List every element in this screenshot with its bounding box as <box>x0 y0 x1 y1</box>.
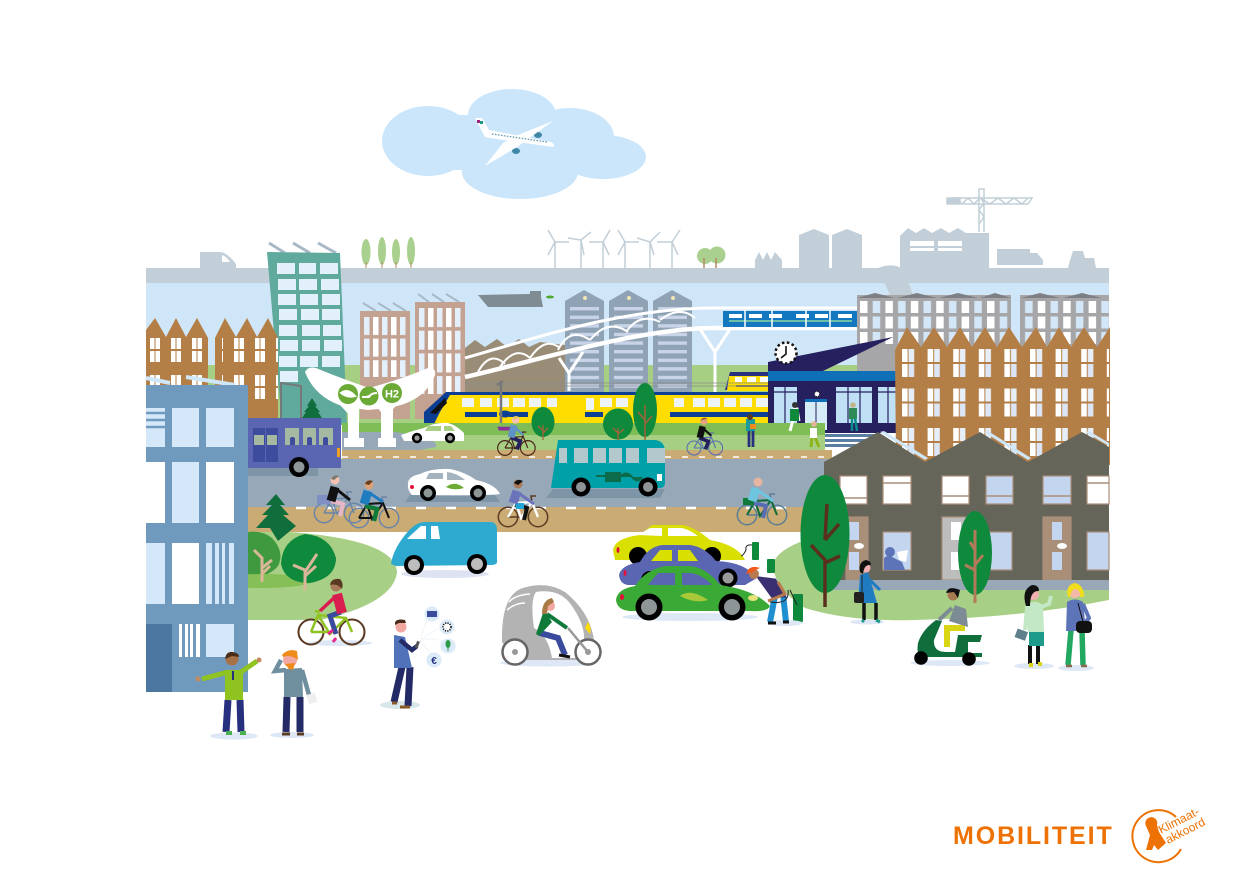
small pine by tower <box>302 398 322 418</box>
station pedestrians <box>746 402 857 447</box>
catenary frame <box>281 383 301 418</box>
yellow passenger train <box>424 392 768 424</box>
distant van <box>200 252 236 268</box>
cloud with airplane <box>382 89 646 199</box>
pink apartment buildings <box>360 294 465 419</box>
left park lawn <box>248 532 397 620</box>
dark row houses <box>824 431 1109 590</box>
purple bus <box>248 418 341 477</box>
woman in mint top <box>1014 585 1054 669</box>
station building <box>760 337 896 447</box>
medium tree <box>958 511 992 603</box>
tower windows <box>277 263 342 382</box>
silo buildings <box>565 290 692 393</box>
grey apartments <box>857 293 1109 373</box>
small white car <box>401 423 464 443</box>
small trees on verge <box>532 383 657 440</box>
white electric car <box>405 469 500 502</box>
large tree <box>800 475 850 607</box>
yellow parked car <box>613 525 745 565</box>
park cyclist <box>298 579 372 646</box>
wind turbines <box>548 230 680 268</box>
green electric car <box>616 566 770 621</box>
road cyclist black bike <box>349 480 399 528</box>
woman with blonde hair and bag <box>1058 583 1094 671</box>
hydrogen filling station <box>305 368 435 447</box>
velomobile tuk-tuk <box>500 585 600 666</box>
purple parked car <box>619 545 757 589</box>
poplar trees <box>362 237 415 268</box>
big brown apartment block <box>895 327 1110 465</box>
teal electric bus <box>546 440 665 498</box>
moored barge <box>478 291 554 307</box>
left brown row houses <box>146 318 278 420</box>
mechanic charging car <box>746 567 803 626</box>
two women chatting <box>1014 583 1094 671</box>
Klimaatakkoord logo: akkoord <box>1163 815 1207 847</box>
section title: MOBILITEIT <box>953 822 1114 850</box>
road surface and cycle paths <box>248 450 832 532</box>
blue elevated train <box>723 309 858 328</box>
distant tractor <box>1068 251 1096 268</box>
road cyclist with panniers <box>314 475 364 523</box>
teal office tower <box>267 243 347 425</box>
Klimaatakkoord logo: Klimaat- <box>1156 804 1202 837</box>
green scooter with rider <box>910 588 990 666</box>
green verge with grass <box>342 423 825 453</box>
construction crane <box>947 189 1032 232</box>
doors and lower windows <box>846 517 1109 580</box>
airplane <box>475 118 554 166</box>
person with smartphone <box>380 606 456 709</box>
distant truck <box>997 249 1043 265</box>
distant skyline <box>146 189 1109 295</box>
factory hall behind bridge <box>465 339 570 392</box>
cyclist on verge <box>497 416 535 455</box>
small houses <box>755 252 782 268</box>
station windows <box>774 387 896 430</box>
blue van <box>391 522 497 578</box>
road cyclist green bike <box>737 478 787 525</box>
station clock <box>776 342 796 364</box>
building windows <box>146 408 234 657</box>
person with orange beard <box>270 650 317 738</box>
park trees <box>212 494 336 590</box>
Klimaatakkoord logo <box>1132 804 1207 862</box>
round trees <box>697 246 726 268</box>
sky band <box>146 283 1109 373</box>
overhead rail wires <box>465 383 768 386</box>
cyclist on verge right <box>687 418 723 455</box>
person in green sweater <box>196 652 262 740</box>
fuel icons <box>338 384 358 404</box>
yellow back train <box>725 372 768 391</box>
station stairs <box>760 434 880 447</box>
app icons: € <box>431 656 437 667</box>
right side lawn <box>773 542 1109 620</box>
person reading in window <box>884 547 908 570</box>
cloud shape <box>382 89 646 199</box>
H2 label: H2 <box>385 388 399 400</box>
elevated rail bridge <box>465 308 858 392</box>
woman in blue coat <box>850 560 884 624</box>
overhead line pole <box>497 381 503 428</box>
silos <box>799 229 862 268</box>
hazy hill <box>878 265 913 295</box>
meadow behind the city <box>146 365 1109 425</box>
charging posts <box>741 542 803 622</box>
road cyclist white bike <box>498 480 548 527</box>
blue apartment building <box>146 377 248 692</box>
factory <box>900 228 989 268</box>
horizon band <box>146 268 1109 283</box>
upper windows <box>840 476 1109 504</box>
